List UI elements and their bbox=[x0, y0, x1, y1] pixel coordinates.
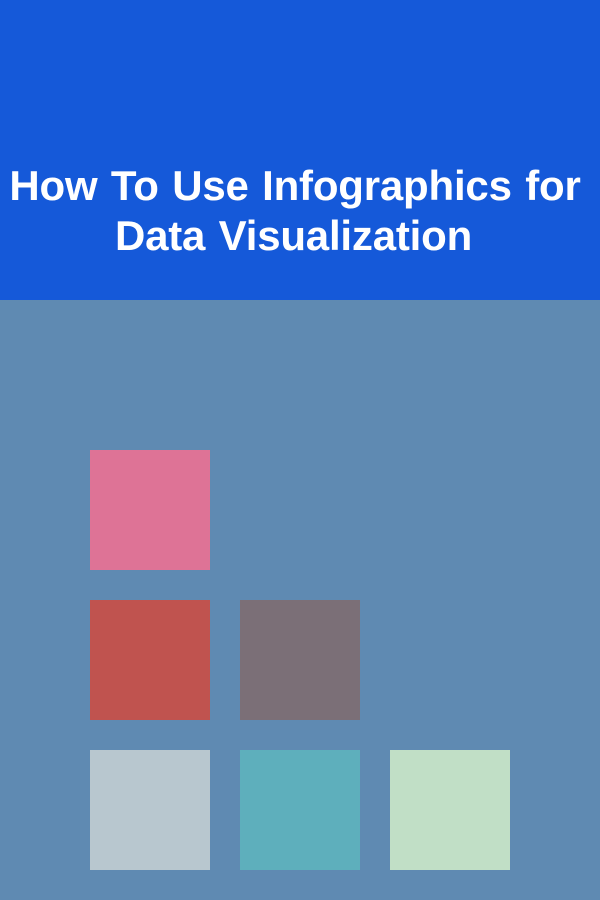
square: teal bbox=[240, 750, 360, 870]
title bbox=[9, 162, 581, 259]
square: pale green bbox=[390, 750, 510, 870]
square: red bbox=[90, 600, 210, 720]
title: How To Use Infographics for bbox=[9, 162, 581, 209]
square: pink bbox=[90, 450, 210, 570]
square: light grey bbox=[90, 750, 210, 870]
title: Data Visualization bbox=[115, 212, 472, 259]
header banner bbox=[0, 0, 600, 300]
square: grey-mauve bbox=[240, 600, 360, 720]
